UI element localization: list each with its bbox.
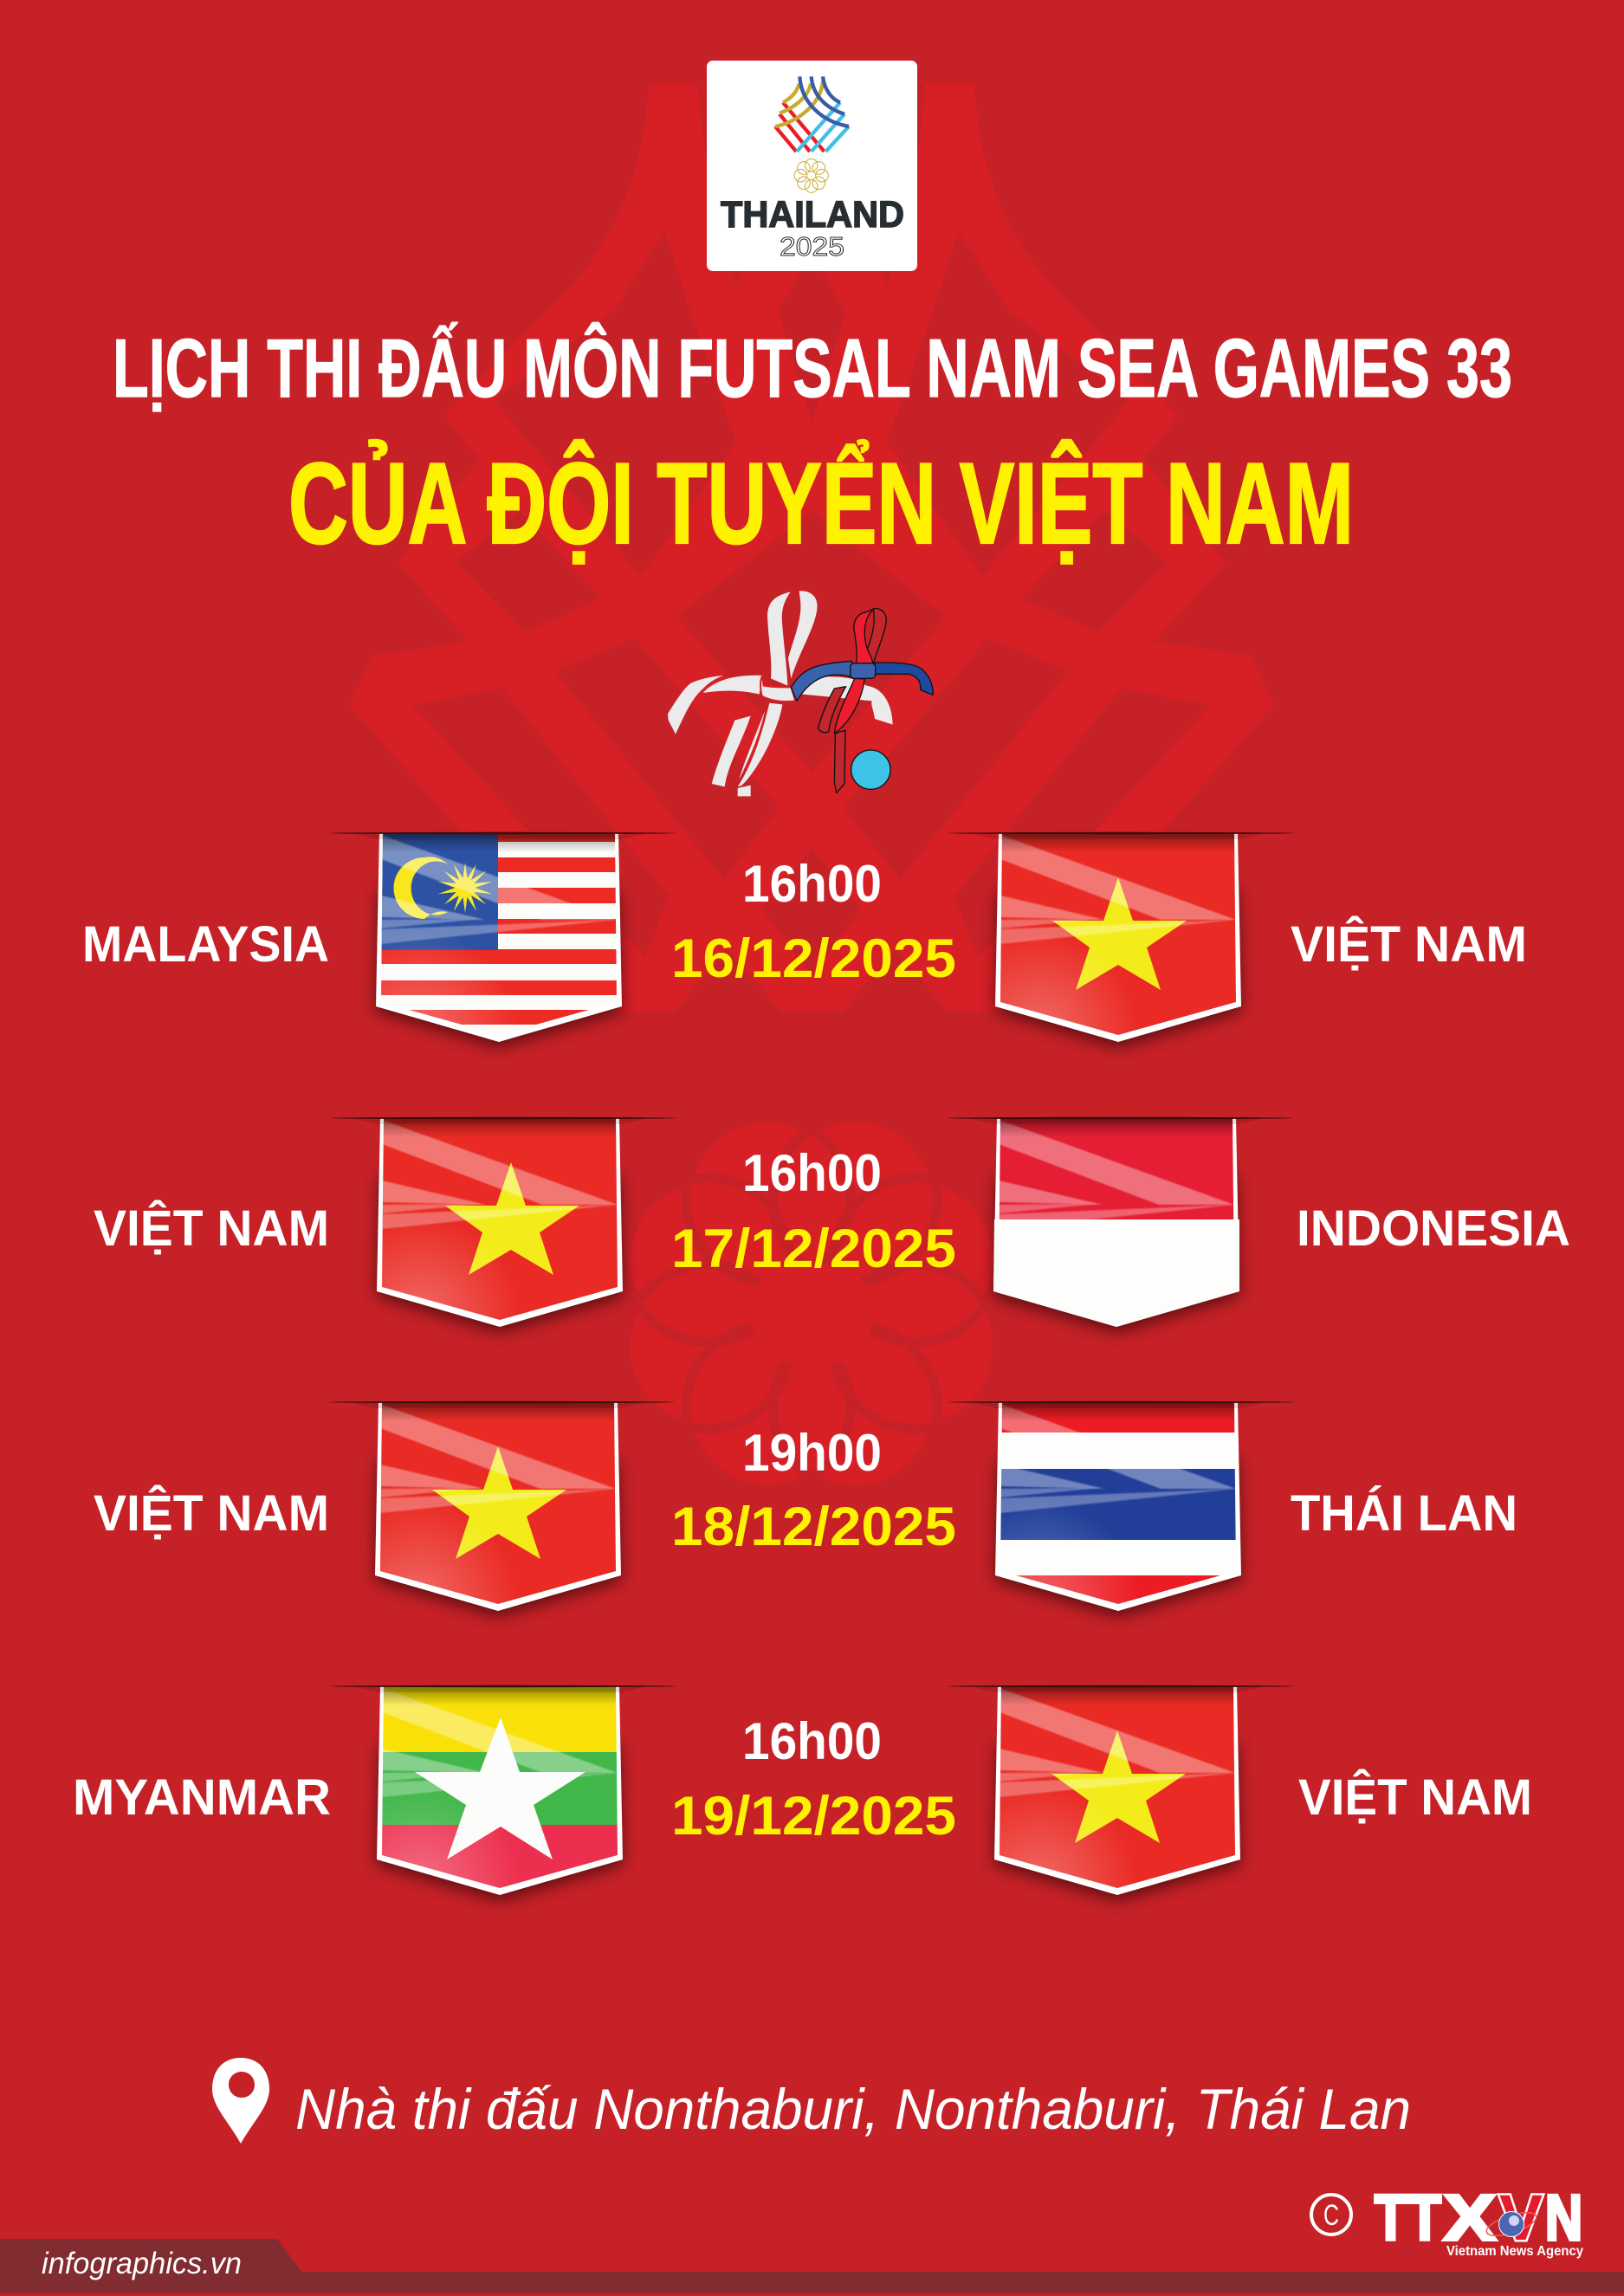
icon: copyright <box>1311 2195 1351 2235</box>
logo year: 2025 <box>780 231 844 262</box>
team name: VIỆT NAM <box>94 1485 329 1542</box>
match time: 19h00 <box>742 1424 882 1482</box>
team name: VIỆT NAM <box>1298 1769 1532 1826</box>
team name: MALAYSIA <box>82 916 329 973</box>
TTXVN wordmark: T <box>1375 2182 1407 2254</box>
TTXVN wordmark: X <box>1444 2182 1496 2254</box>
flag: Indonesia <box>947 1117 1293 1332</box>
team name: INDONESIA <box>1297 1200 1570 1257</box>
match row 4: Myanmar vs Việt Nam <box>73 1685 1532 1900</box>
match date: 18/12/2025 <box>671 1497 956 1557</box>
TTXVN wordmark: T <box>1408 2182 1441 2254</box>
venue text: Nhà thi đấu Nonthaburi, Nonthaburi, Thái Lan <box>295 2077 1411 2141</box>
team name: VIỆT NAM <box>1291 916 1527 973</box>
flag: Malaysia <box>329 832 676 1047</box>
flag: Việt Nam <box>328 1401 675 1616</box>
footer bar <box>0 2239 1624 2293</box>
flag: Thái Lan <box>948 1401 1295 1616</box>
match date: 16/12/2025 <box>671 928 956 989</box>
match time: 16h00 <box>742 1712 882 1770</box>
TTXVN wordmark: V <box>1499 2182 1543 2254</box>
match time: 16h00 <box>742 1144 882 1202</box>
logo wordmark: THAILAND <box>721 194 904 236</box>
team name: MYANMAR <box>73 1769 331 1826</box>
logo card: Thailand 2025 <box>707 61 917 271</box>
match date: 17/12/2025 <box>671 1219 956 1279</box>
footer site name: infographics.vn <box>42 2247 242 2280</box>
background motif: flower <box>625 1117 998 1490</box>
venue <box>212 2058 1411 2144</box>
flag: Việt Nam <box>330 1117 676 1332</box>
match date: 19/12/2025 <box>671 1786 956 1847</box>
agency tagline: Vietnam News Agency <box>1446 2244 1583 2259</box>
match row 3: Việt Nam vs Thái Lan <box>94 1401 1517 1616</box>
TTXVN wordmark <box>1375 2182 1582 2254</box>
flag: Myanmar <box>330 1685 676 1900</box>
team name: THÁI LAN <box>1291 1485 1517 1542</box>
flag: Việt Nam <box>948 832 1295 1047</box>
copyright and TTXVN logo <box>1311 2182 1583 2259</box>
navy-red ribbon figure <box>791 609 933 793</box>
match row 2: Việt Nam vs Indonesia <box>94 1117 1570 1332</box>
white ribbon figure <box>668 591 893 796</box>
team name: VIỆT NAM <box>94 1200 329 1257</box>
TTXVN wordmark: N <box>1545 2182 1582 2254</box>
match time: 16h00 <box>742 855 882 913</box>
icon: futsal ribbon pictogram <box>668 591 933 796</box>
background motif: Thai roof lattice <box>349 84 1274 1012</box>
icon: copyright: C <box>1323 2199 1339 2232</box>
flag: Việt Nam <box>948 1685 1294 1900</box>
match row 1: Malaysia vs Việt Nam <box>82 832 1527 1047</box>
icon: location pin <box>212 2058 269 2144</box>
icon: SEA Games emblem <box>775 76 849 192</box>
